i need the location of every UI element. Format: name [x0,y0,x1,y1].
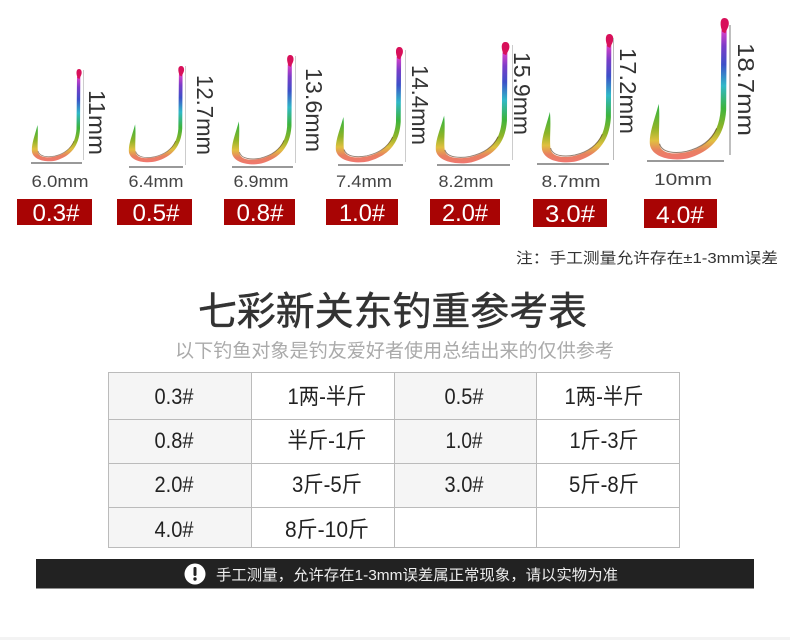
row 4 [154,517,369,542]
badge 2.0# [430,199,500,227]
hook 1.0# [336,47,433,191]
hook 3.0# [537,34,641,191]
hook 0.3#: 11mm [84,90,110,155]
badge 0.3#: 0.3# [32,200,80,227]
measurement note: 注：手工测量允许存在±1-3mm误差 [516,250,778,267]
row 1: 0.5# [444,384,484,409]
badge 0.5# [117,199,192,227]
badge 2.0#: 2.0# [442,200,489,227]
hook 1.0#: 7.4mm [336,172,392,191]
hook 2.0# [436,42,535,191]
row 3 [154,472,639,497]
hook 3.0#: 17.2mm [615,48,641,134]
row 3: 3.0# [444,472,484,497]
row 4: 4.0# [154,517,194,542]
icon: exclamation [184,564,206,584]
weight reference table [108,372,680,548]
row 1 [154,384,644,409]
row 2 [154,428,638,453]
badge 1.0#: 1.0# [339,200,386,227]
hook 2.0#: 15.9mm [509,52,535,135]
hook 2.0#: 8.2mm [438,172,494,191]
title: 七彩新关东钓重参考表 [198,291,587,334]
row 2: 1斤-3斤 [570,428,638,453]
hook 0.8#: 13.6mm [301,68,327,152]
row 2: 半斤-1斤 [288,428,366,453]
badge 4.0# [644,199,717,229]
row 2: 0.8# [154,428,194,453]
notice text: 手工测量，允许存在1-3mm误差属正常现象，请以实物为准 [216,567,618,584]
hook 4.0# [647,18,759,189]
row 1: 1两-半斤 [564,384,644,409]
notice bar [36,559,754,588]
badge 1.0# [326,199,398,227]
hook 0.5# [128,66,218,191]
row 4: 8斤-10斤 [285,517,369,542]
hook 3.0#: 8.7mm [542,172,600,191]
hook 1.0#: 14.4mm [407,65,433,145]
hook 0.5#: 12.7mm [192,75,218,155]
badge 3.0# [533,199,607,228]
row 2: 1.0# [446,428,483,453]
hook 0.8# [232,55,327,191]
badge 0.3# [17,199,92,227]
row 3: 3斤-5斤 [292,472,362,497]
hook 0.8#: 6.9mm [234,172,288,191]
row 1: 1两-半斤 [288,384,366,409]
badge 0.8# [224,199,295,227]
badge 0.8#: 0.8# [236,200,284,227]
hook 0.5#: 6.4mm [128,172,184,191]
subtitle: 以下钓鱼对象是钓友爱好者使用总结出来的仅供参考 [175,340,614,362]
row 3: 2.0# [154,472,194,497]
badge 0.5#: 0.5# [132,200,180,227]
badge 4.0#: 4.0# [656,202,705,229]
hook 0.3#: 6.0mm [32,172,88,191]
row 3: 5斤-8斤 [569,472,639,497]
badge 3.0#: 3.0# [545,201,596,228]
hook 4.0#: 10mm [654,170,712,189]
hook 0.3# [31,69,110,191]
hook 4.0#: 18.7mm [733,43,759,136]
row 1: 0.3# [154,384,194,409]
